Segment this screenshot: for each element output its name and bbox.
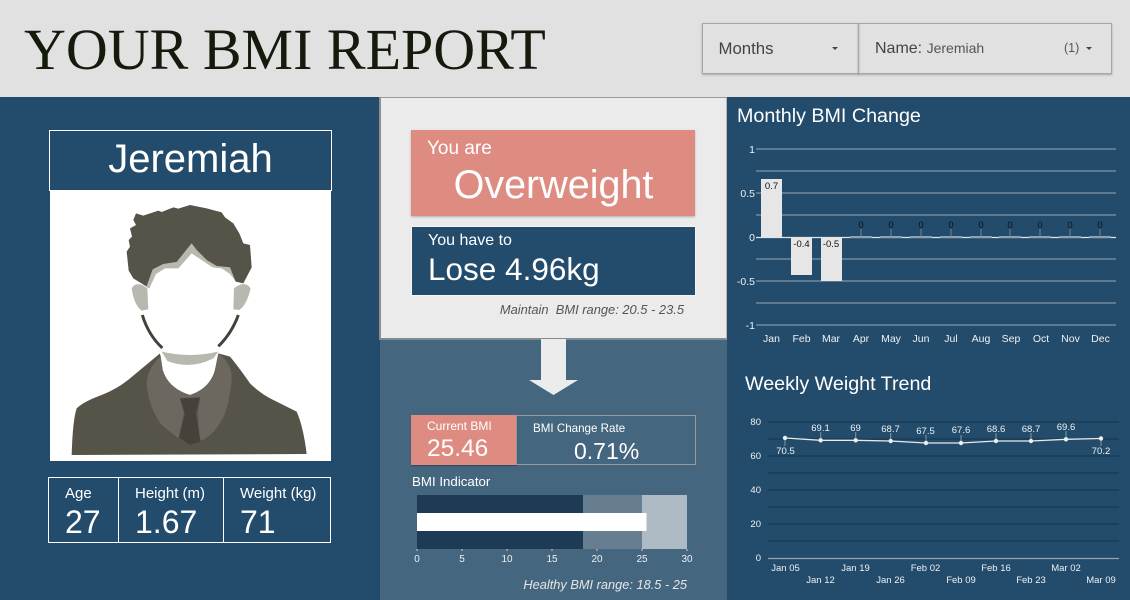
- stat label: age: Age: [65, 485, 92, 502]
- bar chart: monthly bmi change: 0: [749, 232, 755, 244]
- panel: bmi status: [379, 97, 727, 340]
- bar chart: monthly bmi change: 0: [1067, 220, 1073, 231]
- bar chart: monthly bmi change: 0: [948, 220, 954, 231]
- dropdown: name: [858, 23, 1112, 74]
- goal value: Lose 4.96kg: [428, 251, 600, 287]
- line chart: weekly weight trend: 20: [750, 519, 761, 530]
- stat: weight: [223, 477, 331, 543]
- bar chart: monthly bmi change: May: [881, 333, 902, 345]
- icon: person portrait: [50, 191, 331, 461]
- line chart: weekly weight trend: 67.5: [916, 426, 935, 437]
- bullet chart: 20: [591, 554, 603, 565]
- bar chart: monthly bmi change: Jun: [913, 333, 930, 345]
- line chart: weekly weight trend: Jan 05: [771, 563, 800, 574]
- bullet chart: 10: [501, 554, 513, 565]
- bar chart: monthly bmi change: Jan: [763, 333, 780, 345]
- bar chart: monthly bmi change: Nov: [1061, 333, 1081, 345]
- line chart: weekly weight trend: Feb 02: [911, 563, 940, 574]
- status card: overweight: [411, 130, 695, 216]
- line chart: weekly weight trend: 40: [750, 485, 761, 496]
- bar chart: monthly bmi change: Aug: [972, 333, 990, 345]
- stat: height: [118, 477, 224, 543]
- bar chart: monthly bmi change: -0.5: [823, 239, 839, 250]
- bar chart: monthly bmi change: 0: [1037, 220, 1043, 231]
- goal card: lose weight: [411, 226, 696, 296]
- bar chart: monthly bmi change: 0: [1007, 220, 1013, 231]
- current bmi value: 25.46: [427, 435, 488, 462]
- status value: Overweight: [454, 163, 653, 207]
- bar chart: monthly bmi change: Feb: [792, 333, 811, 345]
- bar chart: monthly bmi change: Oct: [1033, 333, 1049, 345]
- line chart: weekly weight trend: Mar 02: [1051, 563, 1081, 574]
- line chart: weekly weight trend: 70.5: [776, 446, 795, 457]
- line chart: weekly weight trend: Jan 19: [841, 563, 870, 574]
- line chart: weekly weight trend: 0: [756, 553, 761, 564]
- bar chart: monthly bmi change: Jul: [944, 333, 958, 345]
- maintain range note: Maintain BMI range: 20.5 - 23.5: [500, 302, 684, 317]
- header bar: [0, 0, 1130, 97]
- change rate value: 0.71%: [574, 438, 639, 464]
- line chart: weekly weight trend: Jan 26: [876, 575, 905, 586]
- bullet chart: [414, 495, 693, 565]
- title: YOUR BMI REPORT: [24, 17, 546, 82]
- stat: age: [48, 477, 119, 543]
- bar chart: monthly bmi change: 0: [858, 220, 864, 231]
- line chart: weekly weight trend: 67.6: [952, 425, 970, 436]
- card: current bmi: [411, 415, 517, 465]
- bar chart: monthly bmi change: 1: [749, 144, 755, 156]
- line chart: weekly weight trend: 80: [750, 417, 761, 428]
- line chart: weekly weight trend: 69: [850, 423, 861, 434]
- bullet chart: 30: [681, 554, 693, 565]
- bar chart: monthly bmi change: Apr: [853, 333, 870, 345]
- bar chart: monthly bmi change: 0.7: [765, 181, 778, 192]
- bar chart: monthly bmi change: Sep: [1002, 333, 1020, 345]
- line chart: weekly weight trend: 70.2: [1092, 446, 1110, 457]
- panel: profile: [0, 97, 380, 600]
- bar chart: monthly bmi change: Mar: [822, 333, 841, 345]
- bar chart: monthly bmi change: 0: [918, 220, 924, 231]
- stat value: height: 1.67: [135, 504, 197, 540]
- arrow: down: [529, 339, 578, 395]
- bar chart: monthly bmi change: -0.5: [737, 276, 755, 288]
- chart heading: weekly weight trend: Weekly Weight Trend: [745, 373, 931, 395]
- stat label: height: Height (m): [135, 485, 205, 502]
- stat label: weight: Weight (kg): [240, 485, 316, 502]
- bullet chart: 25: [636, 554, 648, 565]
- line chart: weekly weight trend: Mar 09: [1086, 575, 1116, 586]
- dropdown caret: name: [1086, 47, 1092, 50]
- dropdown: months: [702, 23, 859, 74]
- name heading: Jeremiah: [108, 137, 273, 181]
- line chart: weekly weight trend: 60: [750, 451, 761, 462]
- line chart: weekly weight trend: Feb 16: [981, 563, 1011, 574]
- line chart: weekly weight trend: 69.6: [1057, 422, 1075, 433]
- bar chart: monthly bmi change: 0.5: [740, 188, 755, 200]
- bullet heading: BMI Indicator: [412, 474, 490, 489]
- dropdown caret: months: [832, 47, 838, 50]
- bar chart: monthly bmi change: -0.4: [793, 239, 810, 250]
- bar chart: monthly bmi change: 0: [888, 220, 894, 231]
- stat value: weight: 71: [240, 504, 276, 540]
- panel: bmi indicator section: [380, 340, 727, 600]
- dropdown label: name: Name: Jeremiah: [875, 40, 984, 57]
- line chart: weekly weight trend: Feb 09: [946, 575, 976, 586]
- stat value: age: 27: [65, 504, 101, 540]
- panel: charts: [727, 97, 1130, 600]
- bullet chart: 15: [546, 554, 558, 565]
- line chart: weekly weight trend: Jan 12: [806, 575, 835, 586]
- line chart: weekly weight trend: 68.7: [881, 424, 900, 435]
- healthy range note: Healthy BMI range: 18.5 - 25: [523, 577, 687, 592]
- change rate label: BMI Change Rate: [533, 422, 625, 435]
- bar chart: monthly bmi change: 0: [1097, 220, 1103, 231]
- chart heading: monthly bmi change: Monthly BMI Change: [737, 105, 921, 127]
- bar chart: monthly bmi change: [737, 144, 1116, 345]
- line chart: weekly weight trend: 69.1: [811, 423, 830, 434]
- bar chart: monthly bmi change: -1: [746, 320, 755, 332]
- dropdown count: (1): [1064, 41, 1079, 55]
- line chart: weekly weight trend: [750, 417, 1119, 586]
- line chart: weekly weight trend: Feb 23: [1016, 575, 1046, 586]
- bar chart: monthly bmi change: Dec: [1091, 333, 1110, 345]
- line chart: weekly weight trend: 68.7: [1022, 424, 1040, 435]
- status label: You are: [427, 138, 492, 159]
- current bmi label: Current BMI: [427, 419, 492, 433]
- goal label: You have to: [428, 232, 512, 249]
- bar chart: monthly bmi change: 0: [978, 220, 984, 231]
- bullet chart: 0: [414, 554, 420, 565]
- card: bmi change rate: [516, 415, 696, 465]
- line chart: weekly weight trend: 68.6: [987, 424, 1005, 435]
- bullet chart: 5: [459, 554, 465, 565]
- name heading: [49, 130, 332, 191]
- dropdown label: months: Months: [718, 39, 774, 58]
